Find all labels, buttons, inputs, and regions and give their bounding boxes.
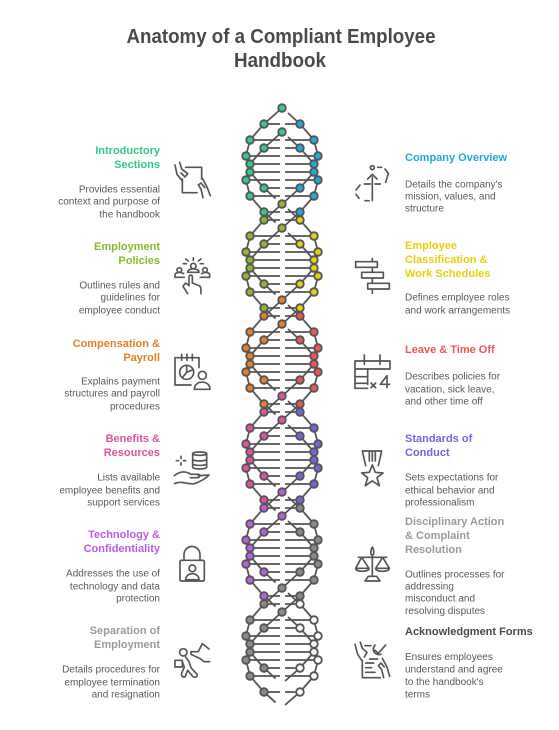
icon: team and pointing hand xyxy=(175,258,210,294)
section: Company Overview xyxy=(405,152,508,214)
section: Leave & Time Off: vacation, sick leave, xyxy=(405,384,494,396)
section: Acknowledgment Forms: Ensures employees xyxy=(405,652,493,663)
section: Employment Policies: Outlines rules and xyxy=(79,280,160,292)
section: Disciplinary Action & Complaint Resolution: Outlines processes for xyxy=(405,570,505,580)
section: Separation of Employment: Separation of xyxy=(90,625,160,637)
section: Introductory Sections xyxy=(58,145,161,220)
icon: balance scales xyxy=(356,547,389,581)
section: Technology & Confidentiality: Addresses the use of xyxy=(66,568,160,580)
section: Standards of Conduct xyxy=(405,433,499,508)
section: Employment Policies: Employment xyxy=(94,241,160,253)
section: Employment Policies xyxy=(79,241,161,316)
section: Technology & Confidentiality xyxy=(66,529,161,604)
section: Acknowledgment Forms: terms xyxy=(405,690,430,700)
section: Employee Classification & Work Schedules: Employee xyxy=(405,240,457,252)
section: Disciplinary Action & Complaint Resolution: misconduct and xyxy=(405,594,475,604)
section: Disciplinary Action & Complaint Resolution: Resolution xyxy=(405,544,462,556)
section: Standards of Conduct: professionalism xyxy=(405,498,474,508)
icon: medal star xyxy=(362,451,383,486)
section: Acknowledgment Forms: Acknowledgment Forms xyxy=(405,626,533,638)
icon: hands holding handbook xyxy=(175,162,210,198)
section: Compensation & Payroll xyxy=(64,338,160,412)
section: Separation of Employment xyxy=(62,625,161,700)
section: Disciplinary Action & Complaint Resolution: resolving disputes xyxy=(405,606,485,617)
section: Separation of Employment: Details procedures for xyxy=(62,664,161,676)
section: Leave & Time Off: Describes policies for xyxy=(405,372,501,382)
icon: signed form with check xyxy=(355,642,390,678)
section: Disciplinary Action & Complaint Resolution: Disciplinary Action xyxy=(405,516,505,528)
section: Acknowledgment Forms: understand and agree xyxy=(405,664,503,676)
section: Disciplinary Action & Complaint Resolution: & Complaint xyxy=(405,530,470,542)
icon: person leaving xyxy=(175,644,210,677)
title xyxy=(126,26,436,72)
icon: database in hand xyxy=(174,452,209,484)
section: Compensation & Payroll: structures and payroll xyxy=(64,388,160,400)
section: Standards of Conduct: Conduct xyxy=(405,447,450,459)
section: Leave & Time Off: and other time off xyxy=(405,396,483,408)
section: Standards of Conduct: Sets expectations for xyxy=(405,472,499,484)
section: Acknowledgment Forms xyxy=(405,626,533,700)
section: Introductory Sections: Introductory xyxy=(95,145,161,157)
section: Introductory Sections: Provides essential xyxy=(79,184,160,196)
section: Introductory Sections: the handbook xyxy=(99,210,161,220)
section: Technology & Confidentiality: Confidentiality xyxy=(84,543,161,555)
icon: arrow with dashed loop xyxy=(356,166,388,201)
section: Employee Classification & Work Schedules xyxy=(405,240,510,316)
section: Separation of Employment: Employment xyxy=(94,639,160,651)
section: Technology & Confidentiality: technology and data xyxy=(70,582,160,592)
section: Separation of Employment: employee termination xyxy=(64,678,160,688)
section: Acknowledgment Forms: to the handbook's xyxy=(405,677,484,688)
section: Compensation & Payroll: Compensation & xyxy=(73,338,160,350)
section: Company Overview: structure xyxy=(405,204,444,214)
section: Employment Policies: employee conduct xyxy=(79,306,160,316)
section: Benefits & Resources: Resources xyxy=(104,447,160,459)
title: Handbook xyxy=(234,50,327,72)
section: Benefits & Resources: employee benefits and xyxy=(59,486,160,496)
section: Company Overview: Details the company's xyxy=(405,180,503,190)
section: Introductory Sections: Sections xyxy=(114,159,160,171)
icon: gantt schedule xyxy=(356,258,389,293)
section: Leave & Time Off xyxy=(405,344,501,408)
section: Employee Classification & Work Schedules: Work Schedules xyxy=(405,268,490,280)
section: Standards of Conduct: Standards of xyxy=(405,433,473,445)
section: Benefits & Resources: support services xyxy=(87,498,160,508)
section: Employment Policies: guidelines for xyxy=(101,292,161,304)
section: Employee Classification & Work Schedules: Classification & xyxy=(405,254,488,266)
section: Benefits & Resources xyxy=(59,433,160,508)
section: Technology & Confidentiality: Technology & xyxy=(88,529,160,541)
section: Employment Policies: Policies xyxy=(118,255,160,267)
section: Disciplinary Action & Complaint Resolution xyxy=(405,516,505,617)
section: Standards of Conduct: ethical behavior and xyxy=(405,486,495,496)
title: Anatomy of a Compliant Employee xyxy=(126,26,436,48)
section: Separation of Employment: and resignation xyxy=(92,690,160,700)
section: Compensation & Payroll: Explains payment xyxy=(81,376,160,388)
section: Employee Classification & Work Schedules: and work arrangements xyxy=(405,306,510,316)
section: Compensation & Payroll: Payroll xyxy=(123,352,160,364)
section: Disciplinary Action & Complaint Resolution: addressing xyxy=(405,582,454,592)
section: Compensation & Payroll: procedures xyxy=(110,402,160,412)
section: Company Overview: mission, values, and xyxy=(405,192,496,202)
section: Technology & Confidentiality: protection xyxy=(116,594,160,604)
icon: calendar times four xyxy=(355,355,390,388)
chart: DNA double helix xyxy=(242,104,322,705)
section: Leave & Time Off: Leave & Time Off xyxy=(405,344,495,356)
section: Benefits & Resources: Lists available xyxy=(97,472,160,484)
icon: calendar with chart and person xyxy=(175,354,210,389)
icon: padlock with person xyxy=(180,546,204,581)
section: Employee Classification & Work Schedules: Defines employee roles xyxy=(405,292,510,304)
section: Introductory Sections: context and purpose of xyxy=(58,196,160,208)
section: Benefits & Resources: Benefits & xyxy=(106,433,160,445)
section: Company Overview: Company Overview xyxy=(405,152,508,164)
